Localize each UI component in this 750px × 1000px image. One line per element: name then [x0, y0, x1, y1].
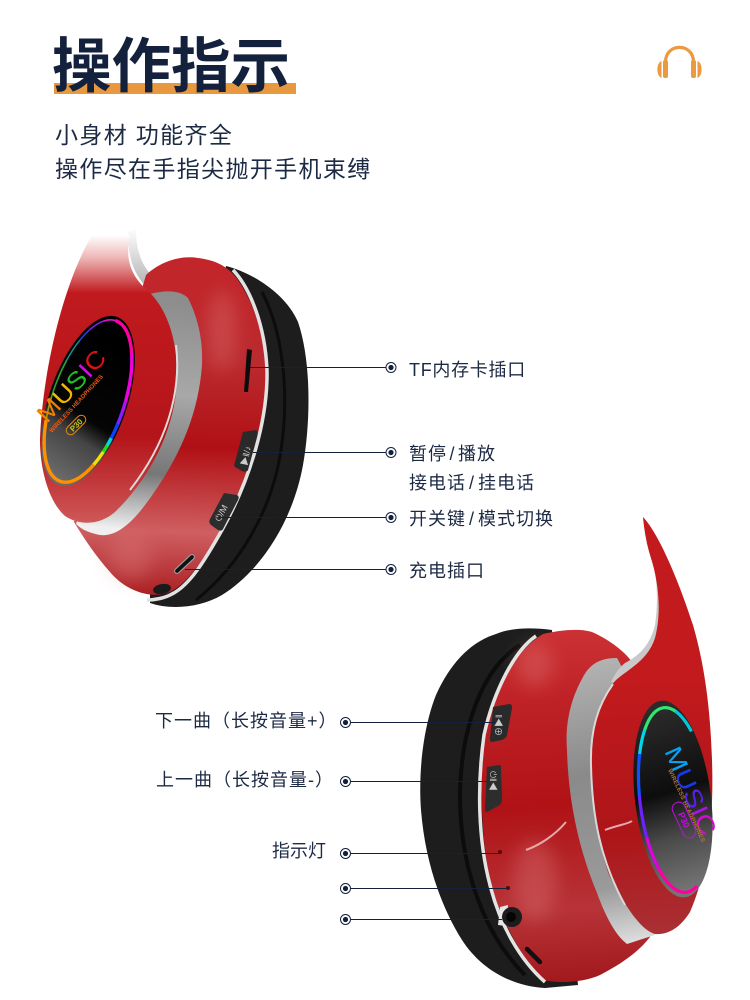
rainbow ring — [26, 309, 150, 493]
USB-C port — [177, 557, 192, 571]
title text: 操作指示 — [52, 33, 290, 100]
subtitle line 1: 小身材 功能齐全 — [55, 122, 233, 148]
callout: charging port — [185, 561, 485, 581]
cushion inner ridge — [460, 645, 525, 975]
silver trim — [480, 636, 545, 982]
left headphone earcup — [22, 228, 308, 607]
silver ring — [76, 291, 202, 535]
callout: pause play and phone: 暂停/播放 — [409, 444, 496, 464]
callout: indicator light: 指示灯 — [272, 841, 326, 861]
plate silver edge — [130, 345, 177, 490]
callout: power and mode: 开关键/模式切换 — [409, 509, 554, 529]
horn silver inner — [611, 540, 665, 690]
callout: previous track: 上一曲（长按音量-） — [156, 770, 334, 790]
cushion inner ridge — [196, 292, 285, 600]
MUSIC lettering: MUSIC — [32, 345, 112, 428]
model badge: P30 — [676, 811, 692, 829]
TF card slot — [244, 349, 252, 392]
subtitle line 2: 操作尽在手指尖抛开手机束缚 — [55, 156, 372, 182]
callout: next track — [155, 711, 495, 731]
front red plate — [40, 235, 177, 523]
small product text: WIRELESS HEADPHONES — [666, 768, 705, 843]
model badge — [670, 800, 698, 840]
previous track button — [485, 765, 502, 812]
next track button — [490, 704, 512, 742]
callout: power and mode — [218, 509, 554, 529]
plate silver edge — [591, 684, 625, 905]
subtitle — [55, 122, 372, 182]
title — [52, 33, 296, 100]
LED disc — [623, 696, 723, 902]
silver trim — [147, 270, 267, 600]
indicator light 1 — [498, 850, 502, 854]
small product text: WIRELESS HEADPHONES — [49, 374, 105, 434]
callout: pause play and phone: 接电话/挂电话 — [409, 473, 535, 493]
title underline bar — [54, 83, 296, 94]
disc body — [22, 304, 154, 498]
callout: previous track — [156, 770, 487, 790]
model badge: P30 — [68, 417, 85, 434]
ear cushion — [150, 266, 308, 607]
audio jack — [498, 905, 522, 927]
MUSIC lettering: MUSIC — [659, 742, 722, 839]
disc body — [623, 696, 723, 902]
right headphone earcup — [420, 517, 723, 988]
callout: indicator light — [272, 841, 500, 861]
power mode button — [209, 493, 239, 531]
callout: next track: 下一曲（长按音量+） — [155, 711, 338, 731]
USB-C port — [527, 949, 540, 962]
shell highlights — [513, 643, 557, 920]
rainbow ring — [629, 703, 721, 897]
callout: second light — [340, 884, 507, 894]
power mode button: ⏻/M — [213, 503, 230, 523]
red outer shell — [74, 257, 266, 595]
callout: pause play and phone — [253, 444, 535, 493]
shell reflection — [526, 821, 632, 850]
callout: audio jack — [340, 914, 502, 924]
icon: headphones — [657, 47, 702, 78]
indicator light 2 — [506, 886, 510, 890]
pause play button: ▶‖/♪ — [239, 445, 253, 466]
callout: charging port: 充电插口 — [409, 561, 485, 581]
callout: TF card slot — [250, 360, 526, 380]
headband fading out — [128, 228, 154, 288]
dim ring segment — [26, 309, 150, 493]
pause play button — [234, 430, 258, 472]
front red plate with horn — [591, 517, 712, 934]
callout: TF card slot: TF内存卡插口 — [409, 360, 526, 380]
ear cushion — [420, 628, 578, 988]
LED disc — [22, 304, 154, 498]
audio jack — [152, 583, 172, 595]
model badge — [64, 413, 88, 437]
shell highlights — [108, 290, 236, 580]
silver ring — [567, 658, 655, 944]
next track button: ⊕▶‖ — [494, 714, 504, 736]
red outer shell — [481, 630, 650, 982]
previous track button: ⏻‖◀ — [488, 771, 498, 791]
